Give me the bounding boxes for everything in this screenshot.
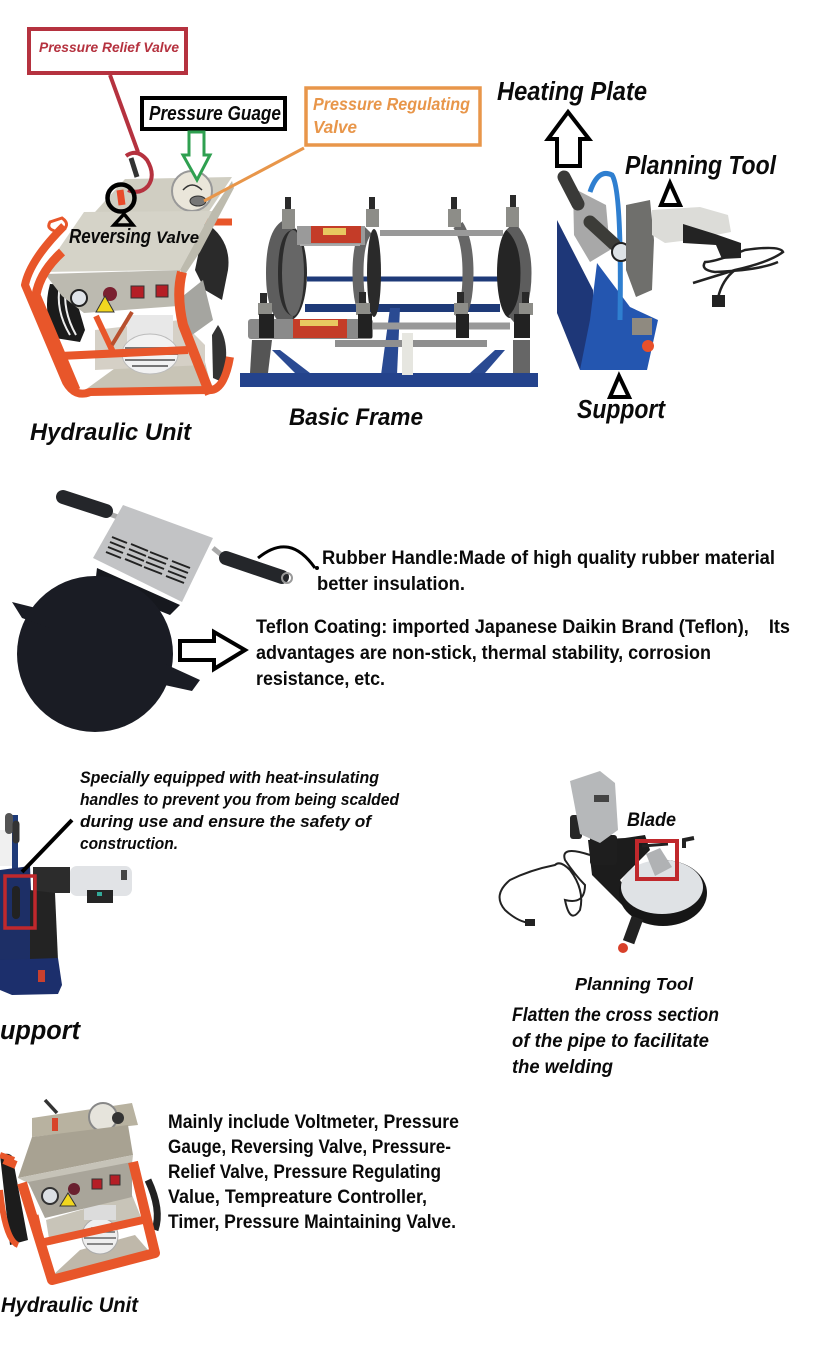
- panel: basic frame: [240, 195, 538, 431]
- label: reversing valve: Valve: [156, 229, 199, 247]
- caption: basic frame: Basic Frame: [289, 404, 423, 431]
- callout: teflon coating: resistance, etc.: [256, 669, 385, 690]
- highlight: blade: [637, 841, 677, 879]
- photo: hydraulic unit: [25, 158, 234, 394]
- label: pressure regulating valve: Pressure Regulating: [313, 94, 470, 114]
- label: pressure regulating valve: Valve: [313, 117, 357, 137]
- text: flatten cross section: Flatten the cross section: [512, 1005, 719, 1026]
- arrow: teflon coating: [180, 632, 245, 669]
- panel: heating plate detail: [12, 497, 790, 732]
- photo: planning tool: [500, 771, 707, 953]
- photo: basic frame: [240, 195, 538, 387]
- text: flatten cross section: the welding: [512, 1057, 613, 1078]
- label: support: [577, 376, 666, 424]
- text: heat-insulating handles: Specially equipped with heat-insulating: [80, 769, 379, 787]
- callout: teflon coating: advantages are non-stick, thermal stability, corrosion: [256, 643, 711, 664]
- text: hydraulic unit contents: Value, Tempreature Controller,: [168, 1187, 427, 1208]
- callout: rubber handle: [258, 547, 775, 595]
- label: planning tool: Planning Tool: [625, 152, 777, 180]
- text: flatten cross section: [512, 1005, 719, 1078]
- panel: support side view: [0, 769, 400, 1045]
- label: heating plate: Heating Plate: [497, 78, 647, 106]
- text: hydraulic unit contents: Timer, Pressure Maintaining Valve.: [168, 1212, 456, 1233]
- text: heat-insulating handles: [80, 769, 400, 853]
- label: pressure gauge: [142, 98, 285, 180]
- label: pressure regulating valve: [204, 88, 480, 201]
- label: heating plate: [497, 78, 647, 166]
- callout: teflon coating: [256, 617, 790, 690]
- leader line: [22, 820, 72, 872]
- callout: rubber handle: Rubber Handle:Made of high quality rubber material: [322, 548, 775, 569]
- text: heat-insulating handles: during use and ensure the safety of: [80, 813, 373, 831]
- label: blade: Blade: [627, 810, 676, 831]
- callout: teflon coating: Teflon Coating: imported Japanese Daikin Brand (Teflon), Its: [256, 617, 790, 638]
- text: flatten cross section: of the pipe to facilitate: [512, 1031, 709, 1052]
- panel: support with heating plate and planning tool: [497, 78, 783, 424]
- panel: hydraulic unit detail: [0, 1100, 459, 1317]
- label: reversing valve: [69, 184, 199, 248]
- highlight: insulated handle: [5, 876, 35, 928]
- label: reversing valve: Reversing: [69, 226, 151, 248]
- photo: heating plate: [12, 497, 292, 732]
- caption: support: upport: [0, 1017, 81, 1045]
- caption: hydraulic unit: Hydraulic Unit: [30, 419, 192, 446]
- label: pressure gauge: Pressure Guage: [149, 103, 281, 125]
- photo: support side view: [0, 815, 132, 995]
- caption: planning tool: Planning Tool: [575, 974, 694, 994]
- caption: hydraulic unit: Hydraulic Unit: [1, 1294, 139, 1317]
- text: hydraulic unit contents: Gauge, Reversing Valve, Pressure-: [168, 1137, 451, 1158]
- text: hydraulic unit contents: Relief Valve, Pressure Regulating: [168, 1162, 441, 1183]
- text: heat-insulating handles: construction.: [80, 835, 178, 853]
- label: pressure relief valve: [29, 29, 186, 192]
- text: hydraulic unit contents: Mainly include Voltmeter, Pressure: [168, 1112, 459, 1133]
- text: hydraulic unit contents: [168, 1112, 459, 1233]
- label: pressure relief valve: Pressure Relief Valve: [39, 39, 179, 55]
- photo: hydraulic unit small: [0, 1100, 157, 1280]
- text: heat-insulating handles: handles to prevent you from being scalded: [80, 791, 400, 809]
- photo: support assembly: [557, 173, 783, 370]
- label: support: Support: [577, 396, 666, 424]
- label: planning tool: [625, 152, 777, 205]
- panel: planning tool detail: [500, 771, 719, 1078]
- panel: hydraulic unit overview: [25, 29, 480, 446]
- callout: rubber handle: better insulation.: [317, 574, 465, 595]
